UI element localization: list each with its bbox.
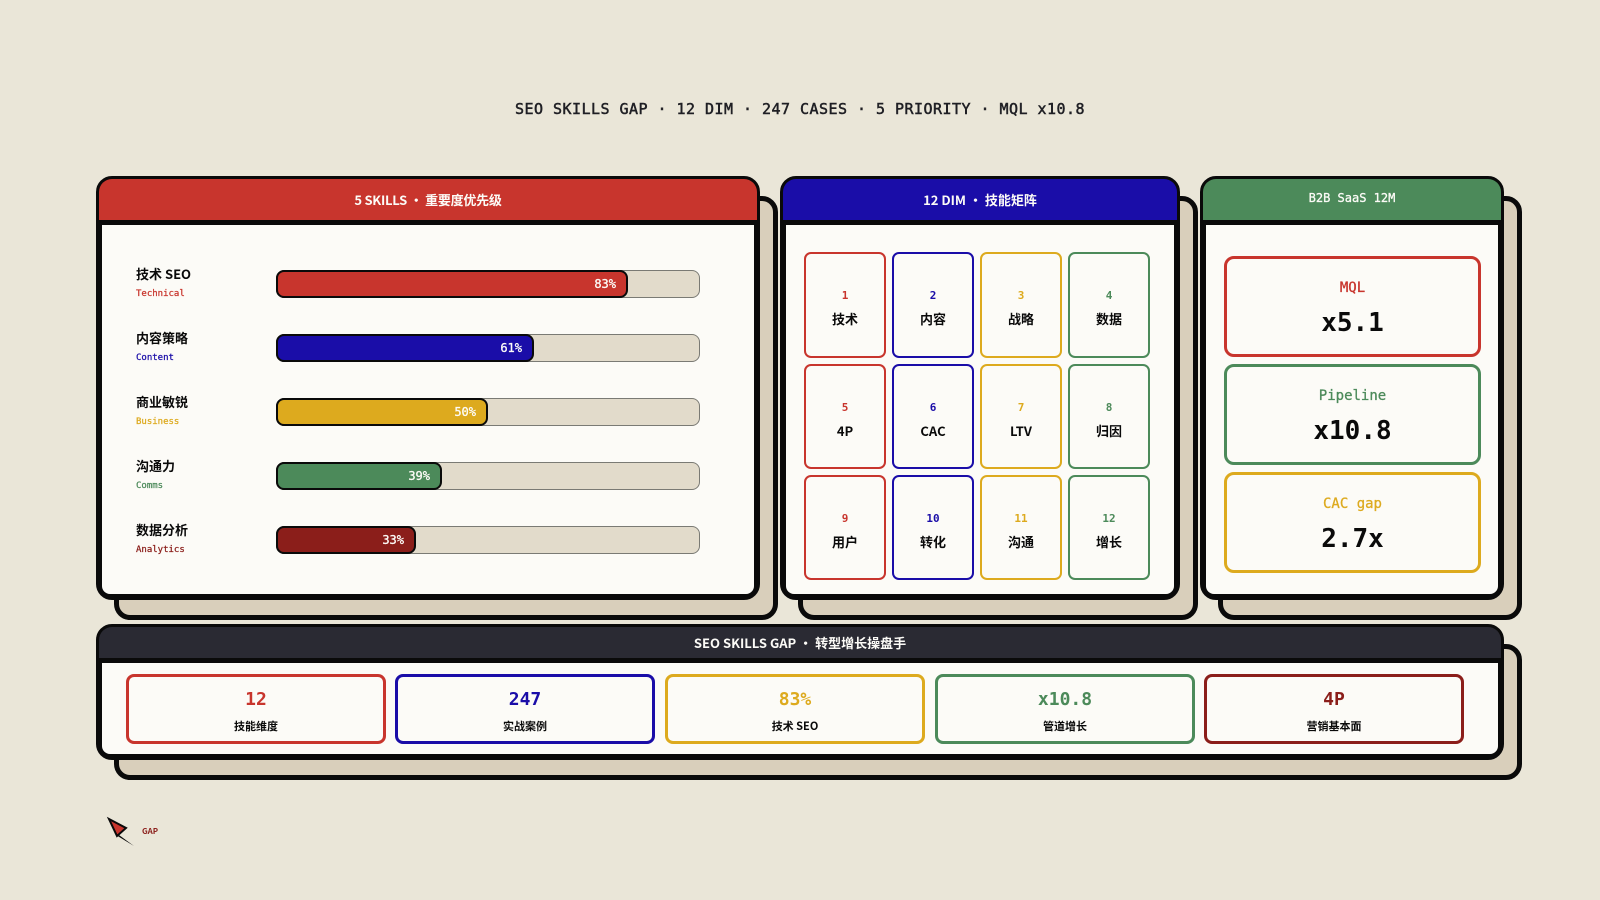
metric card: CAC gap: 2.7x (1321, 524, 1384, 554)
matrix cell 12: 增长 (1096, 532, 1122, 551)
bar: business 50% (276, 398, 700, 426)
heading: results: B2B SaaS 12M (1309, 191, 1395, 205)
panel shadow: summary (114, 644, 1522, 780)
bar: technical 83%: 83% (594, 277, 616, 291)
matrix cell 1: 技术 (832, 309, 858, 328)
panel: skill matrix (780, 176, 1180, 600)
logo text: GAP (142, 826, 158, 837)
metric card: MQL (1224, 256, 1481, 357)
metric card: Pipeline: Pipeline (1319, 388, 1386, 404)
label: content: Content (136, 353, 174, 363)
metric card: MQL: x5.1 (1321, 308, 1384, 338)
stat card: technical seo: 技术 SEO (772, 718, 818, 734)
label: content (136, 328, 188, 363)
bar: technical 83% (276, 270, 700, 298)
heading: matrix (783, 179, 1177, 225)
stat card: pipeline growth (935, 674, 1195, 744)
stat card: marketing fundamentals: 4P (1323, 689, 1345, 710)
heading: skills (99, 179, 757, 225)
matrix cell 4: 数据 (1096, 309, 1122, 328)
stat card: pipeline growth: 管道增长 (1043, 718, 1087, 734)
matrix cell 8 (1068, 364, 1150, 469)
label: analytics: 数据分析 (136, 520, 188, 539)
stat card: pipeline growth: x10.8 (1038, 689, 1092, 710)
bar: comms 39%: 39% (408, 469, 430, 483)
matrix cell 7: LTV (1010, 421, 1032, 440)
matrix cell 10 (892, 475, 974, 580)
matrix cell 2: 内容 (920, 309, 946, 328)
heading: summary: SEO SKILLS GAP • 转型增长操盘手 (694, 633, 906, 652)
matrix cell 6: 6 (930, 401, 936, 414)
matrix cell 11: 沟通 (1008, 532, 1034, 551)
matrix cell 9: 9 (842, 512, 848, 525)
heading: matrix: 12 DIM • 技能矩阵 (923, 190, 1037, 209)
matrix cell 4 (1068, 252, 1150, 358)
bar: analytics 33% (276, 526, 700, 554)
icon: arrow mark (106, 816, 134, 846)
panel body: summary (99, 663, 1501, 757)
heading: skills: 5 SKILLS • 重要度优先级 (354, 190, 502, 209)
panel shadow: matrix (798, 196, 1198, 620)
matrix cell 11: 11 (1014, 512, 1028, 525)
stat card: dimensions (126, 674, 386, 744)
matrix cell 3 (980, 252, 1062, 358)
metric card: CAC gap (1224, 472, 1481, 573)
matrix cell 5: 4P (837, 421, 853, 440)
matrix cell 10: 转化 (920, 532, 946, 551)
label: comms (136, 456, 175, 491)
bar: analytics 33%: 33% (382, 533, 404, 547)
panel shadow: skills (114, 196, 778, 620)
metric card: Pipeline (1224, 364, 1481, 465)
matrix cell 12: 12 (1102, 512, 1116, 525)
label: business: Business (136, 417, 179, 427)
matrix cell 3: 3 (1018, 289, 1024, 302)
matrix cell 5: 5 (842, 401, 848, 414)
heading: summary (99, 627, 1501, 663)
matrix cell 6: CAC (920, 421, 946, 440)
label: analytics (136, 520, 188, 555)
matrix cell 3: 战略 (1008, 309, 1034, 328)
matrix cell 2: 2 (930, 289, 936, 302)
matrix cell 6 (892, 364, 974, 469)
bar: content 61% (276, 334, 700, 362)
stat card: dimensions: 12 (245, 689, 267, 710)
label: content: 内容策略 (136, 328, 188, 347)
matrix cell 11 (980, 475, 1062, 580)
bar: business 50%: 50% (454, 405, 476, 419)
matrix cell 5 (804, 364, 886, 469)
panel: skills priority (96, 176, 760, 600)
panel body: skills (99, 225, 757, 597)
metric card: Pipeline: x10.8 (1313, 416, 1392, 446)
label: technical: 技术 SEO (136, 264, 191, 283)
label: comms: 沟通力 (136, 456, 175, 475)
label: comms: Comms (136, 481, 163, 491)
panel body: matrix (783, 225, 1177, 597)
stat card: cases: 247 (509, 689, 541, 710)
matrix cell 10: 10 (926, 512, 940, 525)
stat card: cases (395, 674, 655, 744)
matrix cell 8: 归因 (1096, 421, 1122, 440)
label: technical: Technical (136, 289, 185, 299)
matrix cell 2 (892, 252, 974, 358)
matrix cell 9: 用户 (832, 532, 858, 551)
panel shadow: results (1218, 196, 1522, 620)
label: business: 商业敏锐 (136, 392, 188, 411)
panel: summary (96, 624, 1504, 760)
matrix cell 1 (804, 252, 886, 358)
label: business (136, 392, 188, 427)
matrix cell 12 (1068, 475, 1150, 580)
stat card: marketing fundamentals: 营销基本面 (1306, 718, 1362, 734)
matrix cell 7 (980, 364, 1062, 469)
panel body: results (1203, 225, 1501, 597)
label: analytics: Analytics (136, 545, 185, 555)
matrix cell 8: 8 (1106, 401, 1112, 414)
stat card: technical seo (665, 674, 925, 744)
title: SEO SKILLS GAP · 12 DIM · 247 CASES · 5 PRIORITY · MQL x10.8 (515, 100, 1085, 118)
metric card: CAC gap: CAC gap (1323, 496, 1382, 512)
matrix cell 1: 1 (842, 289, 848, 302)
stat card: marketing fundamentals (1204, 674, 1464, 744)
stat card: technical seo: 83% (779, 689, 811, 710)
stat card: dimensions: 技能维度 (234, 718, 278, 734)
stat card: cases: 实战案例 (503, 718, 547, 734)
matrix cell 4: 4 (1106, 289, 1112, 302)
matrix cell 9 (804, 475, 886, 580)
label: technical (136, 264, 191, 299)
panel: results (1200, 176, 1504, 600)
heading: results (1203, 179, 1501, 225)
bar: content 61%: 61% (500, 341, 522, 355)
matrix cell 7: 7 (1018, 401, 1024, 414)
bar: comms 39% (276, 462, 700, 490)
metric card: MQL: MQL (1340, 280, 1365, 296)
